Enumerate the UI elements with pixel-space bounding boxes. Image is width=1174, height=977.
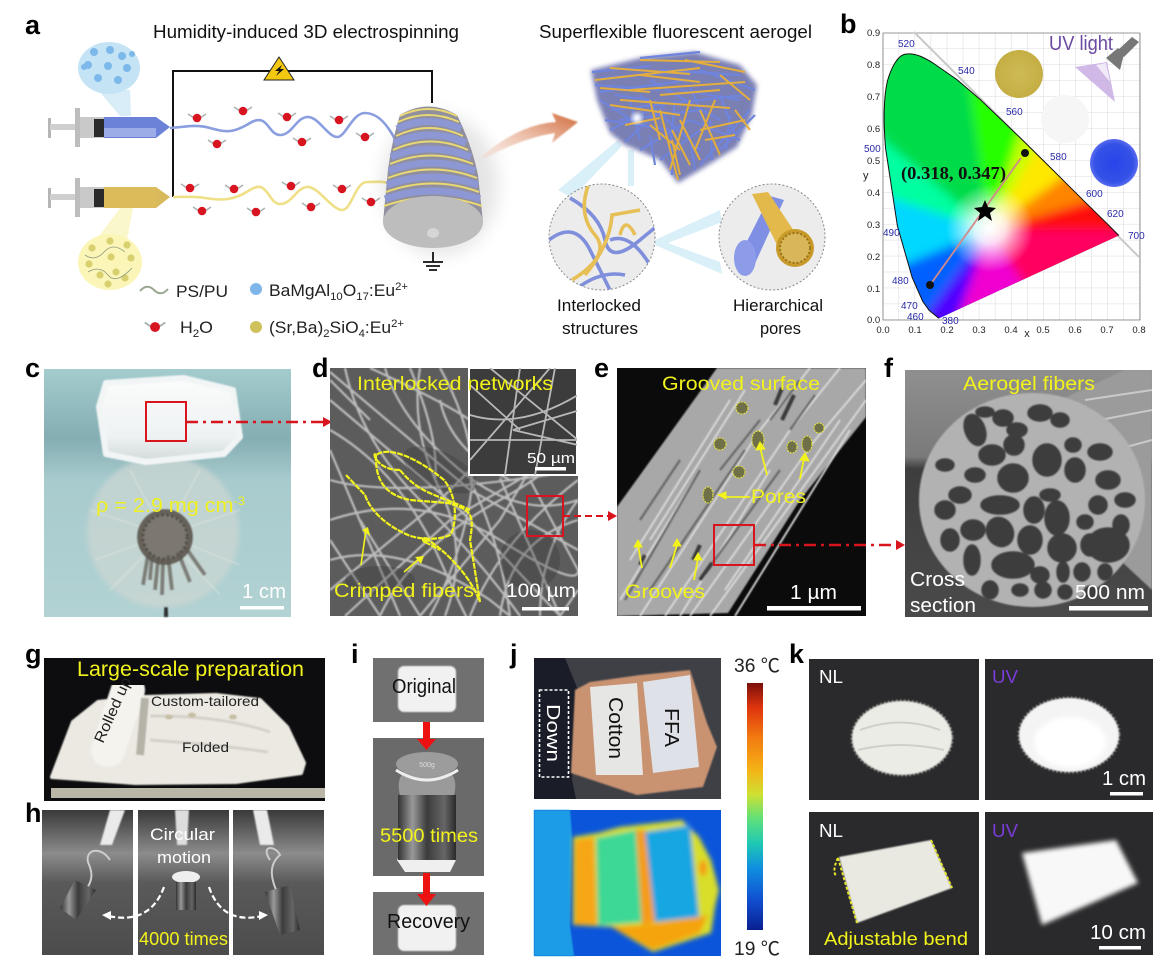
x axis ticks: 0.0 — [876, 325, 890, 336]
icon: blue syringe — [48, 108, 170, 147]
gamut outline — [884, 54, 1119, 318]
y axis ticks: 0.9 — [867, 28, 880, 39]
blue jet fibre — [170, 113, 397, 143]
wavelength labels: 500 — [864, 144, 881, 155]
legend: water — [145, 318, 213, 340]
legend: PS/PU: PS/PU — [176, 282, 228, 301]
gold disc sample — [995, 50, 1043, 98]
heading: large-scale preparation: Large-scale preparation — [77, 658, 304, 681]
panel a: electrospinning schematic — [25, 10, 825, 340]
panel f: aerogel fibre cross section — [884, 353, 1152, 617]
wavelength labels: 490 — [883, 228, 900, 239]
text: 4000 times: 4000 times — [139, 929, 228, 949]
crimped fibres pointer arrows — [361, 527, 428, 572]
SEM image porous fibre — [905, 370, 1152, 617]
x axis ticks: 0.5 — [1036, 325, 1050, 336]
legend: BaMgAl10O17 phosphor — [250, 281, 408, 303]
heading: grooved surface: Grooved surface — [662, 374, 820, 395]
inset: interlocked structures — [549, 184, 662, 290]
CIE colour gamut — [884, 54, 1119, 318]
wavelength labels: 580 — [1050, 152, 1067, 163]
photo background — [44, 658, 325, 801]
text: grooves: Grooves — [625, 582, 705, 603]
photo: UV top — [985, 659, 1153, 800]
scale bar 50 µm: 50 µm — [527, 450, 575, 467]
y axis ticks: 0.5 — [867, 156, 880, 167]
wavelength labels: 480 — [892, 276, 909, 287]
wavelength labels: 620 — [1107, 209, 1124, 220]
text: custom-tailored: Custom-tailored — [151, 693, 259, 709]
scale bar 1 cm: 1 cm — [1102, 768, 1146, 790]
photo: NL bottom — [809, 812, 979, 955]
colour bar min label: 19 ℃ — [734, 939, 780, 960]
UV light label: UV light — [1049, 33, 1113, 55]
text: hierarchical pores: pores — [760, 319, 801, 338]
text: circular motion: motion — [157, 848, 211, 867]
panel label f: f — [884, 353, 894, 383]
x axis ticks: 0.7 — [1100, 325, 1114, 336]
panel label h: h — [25, 798, 42, 828]
ruler — [51, 788, 325, 798]
legend: (Sr,Ba)2SiO4 phosphor: 2 — [323, 328, 330, 340]
legend: (Sr,Ba)2SiO4 phosphor: 2+ — [391, 318, 404, 330]
y axis ticks: 0.8 — [867, 60, 880, 71]
text: UV label top: UV — [992, 667, 1018, 687]
legend: BaMgAl10O17 phosphor: :Eu — [369, 281, 395, 300]
photo original sample — [373, 658, 484, 722]
dashed arrow: swing right — [209, 887, 268, 920]
wavelength labels: 470 — [901, 301, 918, 312]
x axis ticks: 0.6 — [1068, 325, 1082, 336]
y axis ticks: 0.7 — [867, 92, 880, 103]
heading: aerogel fibers: Aerogel fibers — [963, 374, 1095, 395]
legend: BaMgAl10O17 phosphor: O — [343, 281, 356, 300]
panel b: CIE chromaticity diagram — [840, 9, 1150, 340]
scale bar 500 nm — [1069, 582, 1148, 610]
yellow bend edges — [834, 840, 952, 923]
legend: PS/PU — [140, 282, 228, 301]
panel k: natural and UV light photos — [789, 639, 1153, 955]
icon: yellow syringe — [48, 178, 170, 217]
aerogel fibre cluster — [591, 52, 757, 183]
wavelength labels: 600 — [1086, 189, 1103, 200]
legend: (Sr,Ba)2SiO4 phosphor: :Eu — [365, 318, 391, 337]
text: weight engraving: 500g — [419, 762, 435, 769]
SEM image fibre surface — [617, 368, 866, 616]
yellow jet fibre — [173, 182, 388, 210]
dash-dot arrow to f — [754, 540, 905, 550]
text: UV label bottom: UV — [992, 821, 1018, 841]
inset SEM image — [469, 368, 580, 475]
legend: water: H — [180, 318, 192, 337]
legend: BaMgAl10O17 phosphor: 17 — [356, 291, 369, 303]
y axis ticks: 0.4 — [867, 188, 880, 199]
panel label a: a — [25, 10, 41, 40]
y axis ticks: 0.1 — [867, 284, 880, 295]
y axis ticks: 0.3 — [867, 220, 880, 231]
arrow: process direction — [482, 113, 578, 159]
panel c: aerogel on dandelion photo — [25, 353, 332, 617]
red selection box — [714, 525, 754, 565]
y axis ticks: 0.2 — [867, 252, 880, 263]
legend: water: 2 — [193, 328, 199, 340]
photo middle: sample and weight — [138, 810, 229, 955]
photo of hand with samples — [534, 658, 721, 799]
text: hierarchical pores — [733, 296, 823, 338]
icon: white point star — [974, 200, 996, 221]
wavelength labels — [864, 39, 1145, 327]
legend: BaMgAl10O17 phosphor: 2+ — [395, 281, 408, 293]
scale bar 1 cm: 1 cm — [242, 581, 286, 603]
red arrow down 2 — [417, 873, 436, 906]
density text: ρ = 2.9 mg cm — [96, 495, 224, 517]
red selection box — [527, 496, 563, 536]
red selection box — [146, 402, 186, 441]
legend: BaMgAl10O17 phosphor: BaMgAl — [269, 281, 329, 300]
pore pointer arrows — [718, 442, 809, 499]
colour bar max label: 36 ℃ — [734, 656, 780, 677]
text: crimped fibers: Crimped fibers — [334, 581, 474, 602]
text: cross section — [910, 569, 976, 617]
heading: humidity-induced 3D electrospinning: Humidity-induced 3D electrospinning — [153, 22, 459, 42]
panel g: large-scale preparation photo — [25, 639, 325, 801]
thermal image — [534, 810, 721, 956]
heading: interlocked networks: Interlocked networks — [357, 374, 553, 395]
y axis ticks: 0.0 — [867, 315, 880, 326]
wavelength labels: 380 — [942, 316, 959, 327]
photo: UV bottom — [985, 812, 1153, 955]
yellow dashed fibre traces — [346, 452, 480, 602]
red arrow down 1 — [417, 722, 436, 750]
colour shift arrow — [930, 158, 1021, 285]
scale bar 500 nm: 500 nm — [1075, 582, 1145, 604]
photo background — [44, 369, 291, 617]
scale bar 1 µm — [767, 582, 861, 610]
groove pointer arrows — [634, 539, 702, 580]
text: cotton: Cotton — [604, 697, 626, 759]
text: adjustable bend: Adjustable bend — [824, 929, 968, 949]
legend: (Sr,Ba)2SiO4 phosphor — [250, 318, 404, 340]
x axis ticks: x — [1024, 328, 1030, 340]
y axis ticks: 0.6 — [867, 124, 880, 135]
dash arrow to e — [563, 511, 617, 521]
legend: BaMgAl10O17 phosphor: 10 — [330, 291, 343, 303]
text: cross section: section — [910, 595, 976, 617]
dandelion — [87, 456, 240, 617]
text: cross section: Cross — [910, 569, 965, 591]
inset: hierarchical pores — [719, 184, 825, 290]
white disc sample — [1041, 95, 1089, 143]
panel label k: k — [789, 639, 805, 669]
panel d: SEM interlocked networks — [312, 353, 617, 625]
dash-dot arrow to d — [186, 417, 332, 427]
text: original: Original — [392, 676, 456, 698]
panel label c: c — [25, 353, 40, 383]
photo compressed by weight — [373, 738, 484, 876]
photo: NL top — [809, 659, 979, 800]
x axis ticks: 0.4 — [1004, 325, 1018, 336]
y axis ticks — [863, 28, 880, 326]
scale bar 100 µm: 100 µm — [506, 581, 576, 602]
panel label b: b — [840, 9, 856, 39]
wavelength labels: 540 — [958, 66, 975, 77]
panel label j: j — [509, 639, 518, 669]
dashed outline with text: down — [540, 690, 568, 777]
legend: (Sr,Ba)2SiO4 phosphor: (Sr,Ba) — [269, 318, 322, 337]
water molecules — [181, 107, 380, 216]
text: rolled up: Rolled up — [91, 675, 135, 746]
chart grid — [883, 32, 1140, 320]
icon: UV flashlight — [1075, 37, 1139, 102]
wavelength labels: 460 — [907, 312, 924, 323]
icon: yellow precursor magnified bubble — [78, 208, 142, 290]
panel e: SEM grooved surface — [594, 353, 905, 616]
x axis ticks: 0.8 — [1132, 325, 1146, 336]
scale bar 100 µm — [506, 581, 576, 610]
dashed outline with text: down: Down — [543, 704, 563, 762]
pore highlight circles — [703, 402, 824, 503]
photo left: weight swinging left — [42, 810, 133, 955]
panel label d: d — [312, 353, 328, 383]
photo recovered sample — [373, 892, 484, 955]
text: pores: Pores — [751, 487, 806, 508]
heading: superflexible fluorescent aerogel: Superflexible fluorescent aerogel — [539, 22, 812, 42]
blue disc sample — [1090, 139, 1138, 187]
data points — [926, 149, 1029, 289]
wavelength labels: 700 — [1128, 231, 1145, 242]
panel label g: g — [25, 639, 42, 669]
wavelength labels: 520 — [898, 39, 915, 50]
text: circular motion: Circular — [150, 825, 215, 844]
scale bar 10 cm: 10 cm — [1090, 922, 1146, 944]
x axis ticks: 0.1 — [908, 325, 922, 336]
panel j: thermal comparison — [509, 639, 780, 960]
dashed arrow: swing left — [102, 887, 164, 920]
collector drum — [382, 106, 498, 255]
text: circular motion — [150, 825, 215, 867]
scale bar 1 µm: 1 µm — [790, 582, 837, 604]
photo right: weight swinging right — [233, 810, 324, 955]
text: interlocked structures: Interlocked — [557, 296, 641, 315]
legend: (Sr,Ba)2SiO4 phosphor: SiO — [330, 318, 359, 337]
panel h: circular motion photos — [25, 798, 324, 955]
legend: water: O — [199, 318, 213, 337]
text: interlocked structures: structures — [562, 319, 638, 338]
panel label i: i — [351, 639, 359, 669]
panel i: compression photos — [351, 639, 484, 955]
text: FFA: FFA — [660, 708, 682, 748]
text: 5500 times: 5500 times — [380, 826, 478, 847]
text: interlocked structures — [557, 296, 641, 338]
legend: (Sr,Ba)2SiO4 phosphor: 4 — [359, 328, 365, 340]
colour bar — [747, 683, 763, 930]
white foam sheet — [52, 690, 304, 783]
wavelength labels: 560 — [1006, 107, 1023, 118]
panel label e: e — [594, 353, 609, 383]
text: NL label bottom: NL — [819, 821, 843, 841]
x axis ticks — [876, 325, 1146, 340]
x axis ticks: 0.3 — [972, 325, 986, 336]
coordinate label: (0.318, 0.347) — [901, 163, 1006, 184]
icon: blue precursor magnified bubble — [78, 42, 140, 116]
text: recovery: Recovery — [387, 911, 470, 933]
icon: high voltage warning — [264, 57, 294, 80]
icon: ground symbol — [423, 252, 443, 270]
connector beams to insets — [558, 140, 722, 274]
density text: -3 — [233, 494, 245, 508]
x axis ticks: 0.2 — [940, 325, 954, 336]
white aerogel block — [99, 378, 240, 462]
circuit wire — [173, 71, 432, 197]
y axis ticks: y — [863, 170, 869, 182]
text: folded: Folded — [182, 739, 229, 755]
text: hierarchical pores: Hierarchical — [733, 296, 823, 315]
text: NL label top: NL — [819, 667, 843, 687]
SEM image fibres — [330, 368, 579, 625]
